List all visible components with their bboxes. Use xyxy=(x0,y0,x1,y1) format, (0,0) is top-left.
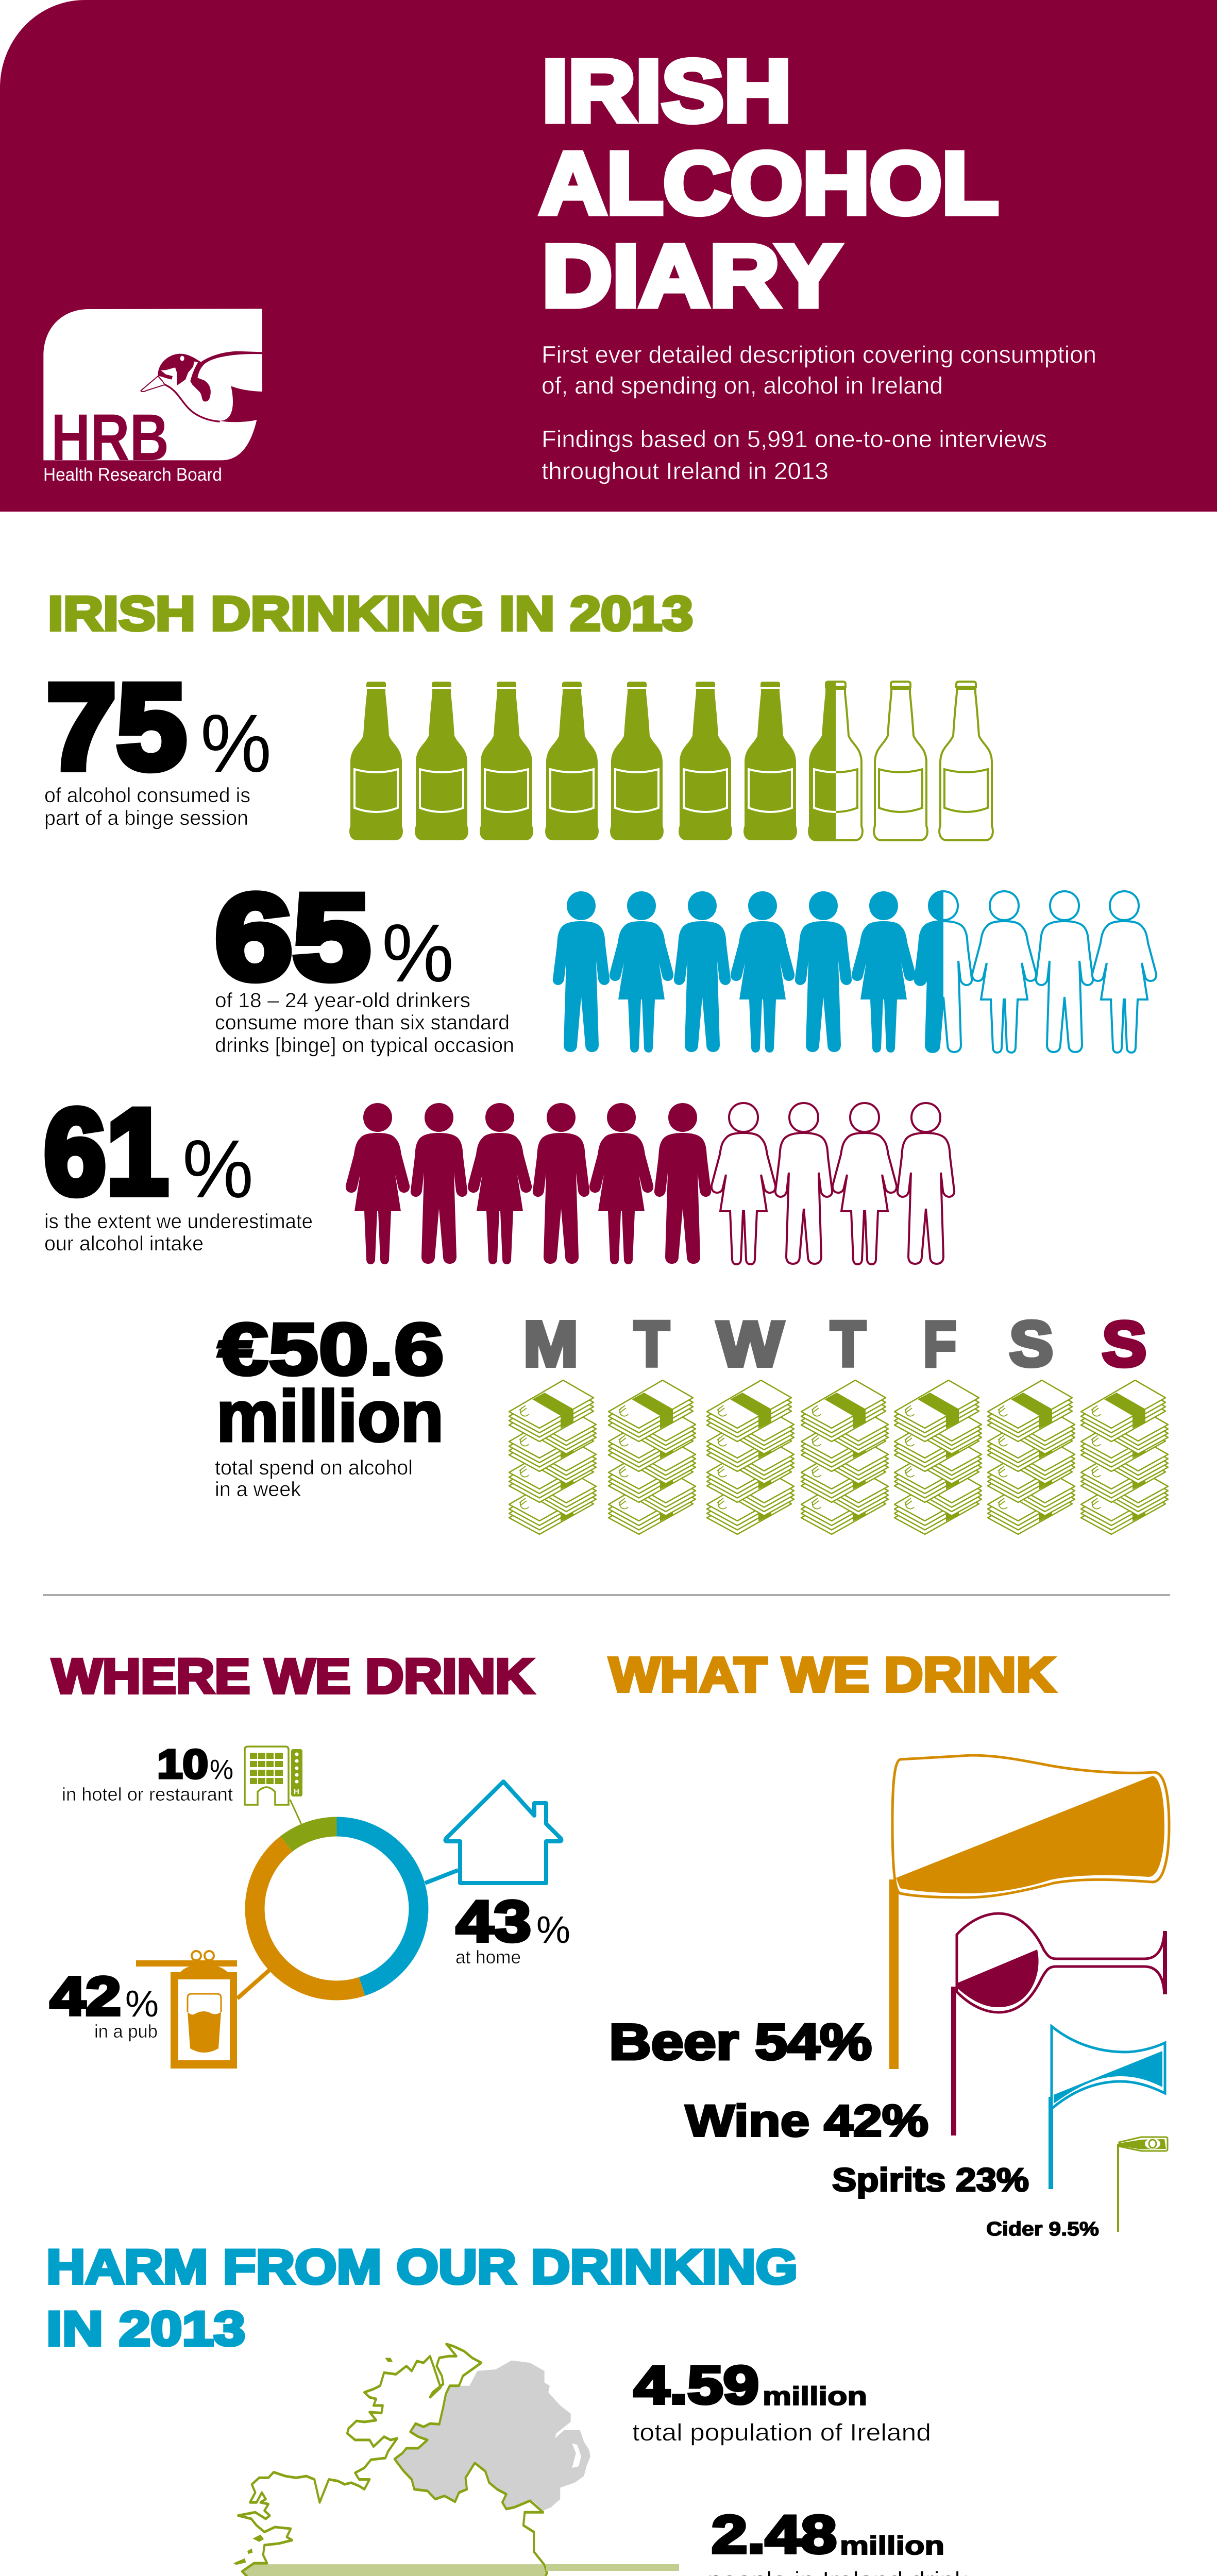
stat: total population xyxy=(632,2355,931,2446)
stat: 42% in a pub xyxy=(50,1966,159,2042)
weekday letters: M xyxy=(523,1309,578,1380)
stat: 43% at home: 43 xyxy=(456,1889,531,1954)
map of Ireland xyxy=(207,2344,679,2576)
weekday letters xyxy=(523,1309,1146,1380)
stat: 65%: consume more than six standard xyxy=(215,1011,510,1034)
stat: 75%: of alcohol consumed is xyxy=(44,784,250,807)
heading: Irish drinking in 2013: IRISH DRINKING IN 2013 xyxy=(48,586,693,640)
icon: house xyxy=(425,1782,561,1883)
label: spirits: Spirits 23% xyxy=(832,2161,1029,2198)
icon row: blue people xyxy=(553,891,1156,1053)
weekday letters: W xyxy=(717,1309,783,1380)
stat: 10% in hotel or restaurant: in hotel or restaurant xyxy=(62,1784,233,1805)
label: beer: Beer 54% xyxy=(609,2013,872,2070)
heading: what we drink: WHAT WE DRINK xyxy=(609,1648,1055,1702)
marker bars xyxy=(546,2564,679,2571)
chart: beer glass pictogram xyxy=(889,1755,1169,2069)
icon: pub xyxy=(136,1951,270,2069)
logo: Health Research Board: Health Research Board xyxy=(43,465,222,485)
intro text: of, and spending on, alcohol in Ireland xyxy=(542,372,943,399)
stat: 61%: % xyxy=(182,1123,253,1215)
stat: 42% in a pub: % xyxy=(125,1984,159,2025)
title: ALCOHOL xyxy=(539,134,999,232)
stat: total population: million xyxy=(763,2382,867,2411)
weekday letters: T xyxy=(634,1309,669,1380)
label: wine: Wine 42% xyxy=(685,2096,928,2146)
icon row: banknote stacks xyxy=(509,1380,1168,1534)
logo: Health Research Board: HRB xyxy=(51,401,169,474)
heading: harm from our drinking: IN 2013 xyxy=(46,2301,245,2355)
stat: people who drink: 2.48 xyxy=(712,2505,837,2565)
intro text: First ever detailed description covering consumption xyxy=(542,341,1096,368)
stat: 50.6 million euro: in a week xyxy=(215,1478,301,1501)
stat: 75%: 75 xyxy=(46,659,187,795)
stat: total population: total population of Ireland xyxy=(632,2419,931,2446)
stat: 42% in a pub: 42 xyxy=(50,1966,121,2027)
stat: 10% in hotel or restaurant: % xyxy=(210,1754,233,1785)
title: DIARY xyxy=(542,227,841,325)
stat: 50.6 million euro: total spend on alcohol xyxy=(215,1456,413,1479)
chart: wine glass pictogram xyxy=(951,1913,1167,2136)
icon: hotel: H xyxy=(294,1787,299,1796)
heading: harm from our drinking xyxy=(46,2240,798,2355)
stat: 42% in a pub: in a pub xyxy=(94,2021,158,2042)
icon: hotel xyxy=(245,1747,302,1824)
chart: spirits glass pictogram xyxy=(1049,2026,1165,2189)
label: cider: Cider 9.5% xyxy=(986,2218,1099,2240)
logo: Health Research Board xyxy=(43,309,262,485)
title xyxy=(539,42,999,325)
stat: 10% in hotel or restaurant xyxy=(62,1741,233,1805)
stat: 43% at home: % xyxy=(536,1908,570,1951)
icon row: burgundy people xyxy=(346,1103,954,1264)
stat: 43% at home xyxy=(455,1889,570,1968)
stat: 50.6 million euro: million xyxy=(216,1376,444,1456)
stat: 61%: our alcohol intake xyxy=(44,1232,204,1255)
weekday letters: S xyxy=(1102,1309,1146,1380)
stat: 75%: part of a binge session xyxy=(44,807,248,829)
stat: 65%: drinks [binge] on typical occasion xyxy=(215,1034,514,1057)
weekday letters: F xyxy=(923,1309,956,1380)
stat: 75% xyxy=(44,659,272,829)
stat: 43% at home: at home xyxy=(455,1946,521,1968)
stat: 10% in hotel or restaurant: 10 xyxy=(157,1741,208,1787)
intro text: Findings based on 5,991 one-to-one interviews xyxy=(542,426,1047,452)
stat: 50.6 million euro: €50.6 xyxy=(218,1309,444,1391)
weekday letters: T xyxy=(831,1309,866,1380)
intro text: throughout Ireland in 2013 xyxy=(542,457,829,484)
heading: where we drink: WHERE WE DRINK xyxy=(52,1649,534,1704)
stat: total population: 4.59 xyxy=(634,2355,759,2415)
heading: harm from our drinking: HARM FROM OUR DRINKING xyxy=(46,2240,798,2294)
stat: 75%: % xyxy=(200,697,272,789)
stat: 65%: of 18 – 24 year-old drinkers xyxy=(215,989,470,1012)
stat: 61%: is the extent we underestimate xyxy=(44,1210,313,1233)
stat: 65%: % xyxy=(382,907,454,999)
chart: cider bottle pictogram xyxy=(1117,2137,1168,2232)
stat: 61% xyxy=(44,1084,313,1255)
title: IRISH xyxy=(542,42,791,140)
weekday letters: S xyxy=(1009,1309,1053,1380)
stat: 50.6 million euro xyxy=(215,1309,444,1501)
Northern Ireland xyxy=(395,2361,590,2511)
icon row: ten bottles xyxy=(349,682,993,840)
stat: 65% xyxy=(215,869,514,1057)
header panel xyxy=(0,0,1217,512)
stat: 61%: 61 xyxy=(44,1084,168,1220)
stat: people who drink xyxy=(707,2505,968,2576)
stat: people who drink: million xyxy=(840,2531,944,2560)
donut chart xyxy=(255,1826,418,1990)
stat: 65%: 65 xyxy=(215,869,370,1005)
intro text xyxy=(542,341,1096,484)
